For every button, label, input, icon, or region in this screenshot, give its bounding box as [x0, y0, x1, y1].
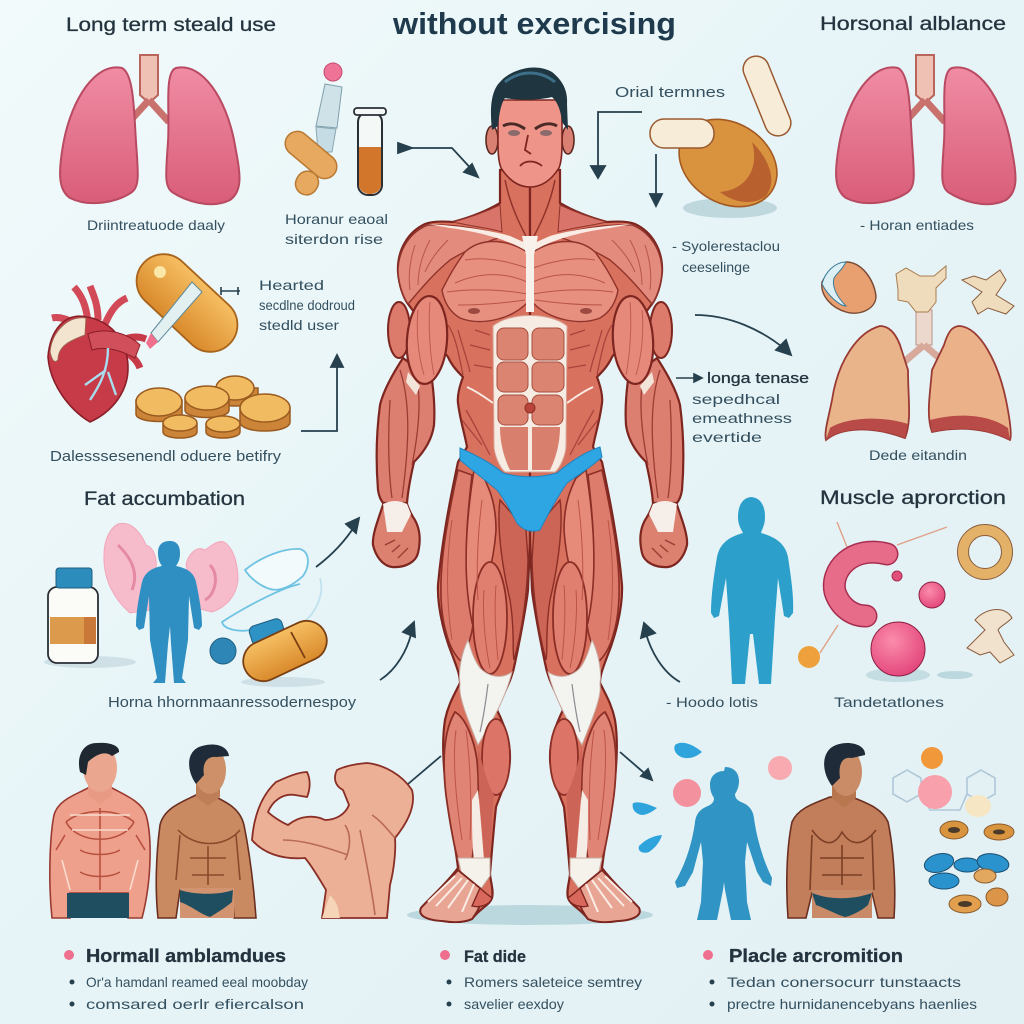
heading: oral ternnes: Orial termnes: [615, 84, 725, 101]
caption: lungs left: Driintreatuode daaly: [87, 217, 225, 233]
head: [486, 67, 574, 187]
icon: damaged lungs with bones: [822, 262, 1014, 440]
heading: muscle atrophy: Muscle aprorction: [820, 488, 1006, 509]
arrow: lower right: [641, 623, 680, 682]
caption: left middle: Dalesssesenendl oduere betifry: [50, 448, 282, 465]
icon: tablet pile: [136, 376, 290, 438]
molecules and pills: [893, 747, 1014, 913]
title: without exercising: [392, 6, 676, 41]
bottom column 2: Fat dide: [464, 947, 526, 966]
right half of body: [530, 170, 687, 922]
icon: capsule with syringe: [125, 243, 249, 363]
figure 2: [156, 744, 256, 918]
arrow: fat to figure: [316, 518, 359, 567]
left half of body: [373, 170, 530, 922]
caption: heart steroid user: secdlne dodroud: [259, 297, 355, 313]
droplets and spheres: [633, 743, 792, 853]
caption: hormone therapy: Horna hhornmaanressodernespoy: [108, 694, 357, 711]
heading: fat accumulation: Fat accumbation: [84, 489, 245, 510]
caption: long tense: sepedhcal: [692, 391, 780, 407]
caption: heart steroid user: Hearted: [259, 277, 324, 293]
caption: long tense: longa tenase: [707, 370, 809, 387]
caption: steroid use: Horanur eaoal: [285, 211, 388, 227]
icon: glassy shape: [222, 549, 321, 631]
caption: heart steroid user: [259, 277, 355, 333]
arrow: to long tense caption: [676, 374, 702, 382]
briefs: [460, 447, 602, 531]
arrow: to figure top left: [398, 143, 478, 177]
figure 5: [787, 743, 895, 918]
caption: steroid use: [285, 211, 388, 247]
icon: heart: [48, 286, 146, 422]
arrow: right of chest: [695, 315, 791, 355]
icon: lungs left: [60, 55, 240, 204]
caption: right middle: Dede eitandin: [869, 447, 967, 463]
arrow: lower left: [380, 622, 415, 680]
figure 1: [50, 743, 150, 918]
caption: tande: Tandetatlones: [834, 694, 944, 710]
bottom column 1: Or'a hamdanl reamed eeal moobday: [86, 974, 308, 990]
bottom column 2: Romers saleteice semtrey: [464, 974, 642, 990]
icon: syringe, capsule and test tube: [280, 63, 386, 199]
icon: organs and rings: [798, 522, 1014, 682]
floor shadow: [407, 905, 653, 925]
bottom column 2: savelier eexdoy: [464, 996, 564, 1012]
bottom column 2: [440, 947, 642, 1012]
bottom column 3: [703, 946, 977, 1012]
arrow: small double: [221, 287, 240, 295]
caption: systemic: [672, 238, 780, 275]
bottom column 1: comsared oerlr efiercalson: [86, 996, 304, 1012]
icon: organs behind silhouette: [104, 523, 238, 613]
caption: systemic: ceeselinge: [682, 259, 750, 275]
bottom column 1: Hormall amblamdues: [86, 946, 286, 966]
caption: systemic: - Syolerestaclou: [672, 238, 780, 254]
bottom column 3: Tedan conersocurr tunstaacts: [727, 974, 961, 990]
icon: lungs right: [836, 55, 1016, 204]
caption: long tense: evertide: [692, 429, 762, 445]
bottom column 1: [64, 946, 308, 1012]
icon: pills, blue and gold: [210, 614, 333, 688]
abs: [493, 316, 567, 472]
icon: blue silhouette right: [711, 497, 793, 684]
caption: steroid use: siterdon rise: [285, 231, 383, 247]
caption: hormone: - Horan entiades: [860, 217, 974, 233]
heading: long term steroid use: Long term steald use: [66, 15, 276, 36]
caption: long tense: emeathness: [692, 410, 792, 426]
icon: oral tablets: [650, 52, 795, 224]
caption: long tense: [692, 370, 809, 445]
sternum line: [522, 236, 538, 312]
lines: lower figure connectors: [408, 752, 652, 784]
arrow: heart to figure: [301, 355, 343, 431]
central figure: [373, 67, 687, 925]
icon: pill bottle: [44, 568, 136, 668]
heading: hormonal imbalance: Horsonal alblance: [820, 14, 1006, 35]
figure 3 flexing: [252, 763, 413, 918]
caption: hoodle lotis: - Hoodo lotis: [666, 694, 758, 710]
arrows: oral tablets: [591, 112, 662, 206]
icon: blue silhouette fat: [136, 541, 202, 683]
figure 4 blue silhouette: [675, 767, 772, 920]
caption: heart steroid user: stedld user: [259, 317, 339, 333]
bottom column 3: Placle arcromition: [729, 946, 903, 966]
bottom figures row: [50, 743, 1014, 920]
bottom column 3: prectre hurnidanencebyans haenlies: [727, 996, 977, 1012]
